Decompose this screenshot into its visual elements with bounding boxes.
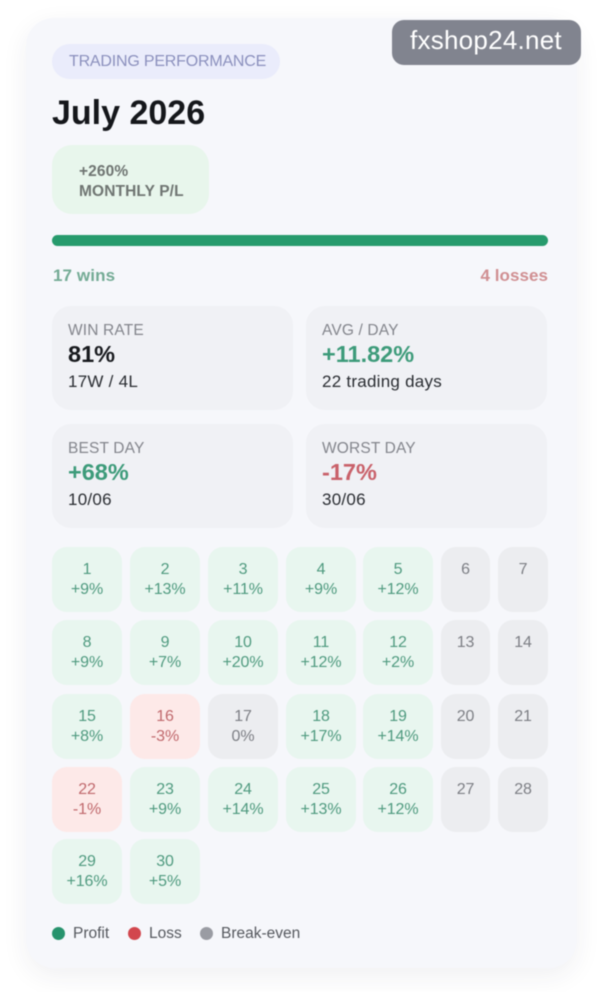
calendar grid: 16 bbox=[156, 708, 174, 725]
calendar grid: 0% bbox=[232, 728, 254, 744]
stat: best day: +68% bbox=[68, 459, 129, 485]
calendar grid: 1 bbox=[83, 561, 91, 578]
losses label: 4 losses bbox=[480, 266, 548, 285]
calendar grid bbox=[52, 547, 548, 904]
calendar grid: 18 bbox=[312, 708, 330, 725]
calendar grid: +9% bbox=[305, 580, 337, 598]
stat: average per day bbox=[306, 306, 547, 410]
calendar grid: 3 bbox=[239, 561, 247, 578]
calendar grid: +14% bbox=[223, 800, 263, 818]
calendar grid: 5 bbox=[394, 561, 402, 578]
stat: win rate: WIN RATE bbox=[68, 322, 144, 339]
stat: average per day: +11.82% bbox=[322, 341, 414, 367]
calendar grid: 28 bbox=[514, 781, 532, 798]
stat: best day: BEST DAY bbox=[68, 440, 144, 457]
calendar grid: +7% bbox=[149, 654, 181, 670]
legend: Break-even bbox=[221, 925, 300, 942]
stat: win rate: 17W / 4L bbox=[68, 372, 138, 391]
calendar grid: +17% bbox=[301, 728, 341, 744]
calendar grid: 25 bbox=[312, 781, 330, 798]
calendar grid: -1% bbox=[73, 800, 101, 818]
calendar grid: 2 bbox=[161, 561, 169, 578]
watermark: fxshop24.net: fxshop24.net bbox=[410, 25, 562, 55]
calendar grid: 7 bbox=[519, 561, 527, 578]
calendar grid: +5% bbox=[149, 872, 181, 890]
calendar grid: +12% bbox=[301, 654, 341, 670]
calendar grid: 17 bbox=[234, 708, 252, 725]
stat: average per day: 22 trading days bbox=[322, 372, 442, 391]
calendar grid: +12% bbox=[378, 800, 418, 818]
calendar grid: +13% bbox=[145, 580, 185, 598]
monthly P/L box: MONTHLY P/L bbox=[79, 182, 184, 200]
title: July 2026 bbox=[52, 94, 205, 132]
stat: worst day: 30/06 bbox=[322, 490, 366, 509]
calendar grid: 14 bbox=[514, 634, 532, 651]
calendar grid: +13% bbox=[301, 800, 341, 818]
calendar grid: 4 bbox=[317, 561, 325, 578]
calendar grid: +11% bbox=[223, 580, 263, 598]
calendar grid: 13 bbox=[457, 634, 474, 651]
monthly P/L box: +260% bbox=[79, 163, 128, 180]
calendar grid: +20% bbox=[223, 654, 263, 670]
calendar grid: 29 bbox=[78, 853, 96, 870]
calendar grid: 20 bbox=[457, 708, 474, 725]
calendar grid: +8% bbox=[71, 728, 103, 744]
progress bar bbox=[52, 235, 548, 246]
legend: Profit bbox=[73, 925, 109, 942]
stat: win rate bbox=[52, 306, 293, 410]
legend: Loss bbox=[149, 925, 182, 942]
calendar grid: 11 bbox=[313, 634, 329, 651]
calendar grid: +14% bbox=[378, 728, 418, 744]
calendar grid: 21 bbox=[514, 708, 532, 725]
stat: worst day: -17% bbox=[322, 459, 377, 485]
stat: worst day bbox=[306, 424, 547, 528]
stat: best day bbox=[52, 424, 293, 528]
calendar grid: +2% bbox=[382, 654, 414, 670]
calendar grid: 23 bbox=[156, 781, 174, 798]
stat: worst day: WORST DAY bbox=[322, 440, 416, 457]
calendar grid: +9% bbox=[149, 800, 181, 818]
stat: best day: 10/06 bbox=[68, 490, 112, 509]
calendar grid: 30 bbox=[156, 853, 174, 870]
badge: trading performance: TRADING PERFORMANCE bbox=[69, 53, 266, 70]
calendar grid: 27 bbox=[457, 781, 474, 798]
calendar grid: 10 bbox=[234, 634, 252, 651]
calendar grid: 22 bbox=[78, 781, 96, 798]
calendar grid: +9% bbox=[71, 580, 103, 598]
calendar grid: 15 bbox=[78, 708, 96, 725]
monthly P/L box bbox=[52, 145, 209, 214]
stat: win rate: 81% bbox=[68, 341, 115, 367]
calendar grid: -3% bbox=[151, 728, 179, 744]
calendar grid: 6 bbox=[461, 561, 470, 578]
watermark: fxshop24.net bbox=[392, 20, 581, 65]
stat: average per day: AVG / DAY bbox=[322, 322, 399, 339]
calendar grid: 9 bbox=[161, 634, 169, 651]
calendar grid: 12 bbox=[389, 634, 407, 651]
calendar grid: 8 bbox=[83, 634, 91, 651]
calendar grid: +12% bbox=[378, 580, 418, 598]
calendar grid: 19 bbox=[389, 708, 407, 725]
wins label: 17 wins bbox=[53, 266, 115, 285]
calendar grid: 26 bbox=[389, 781, 407, 798]
calendar grid: 24 bbox=[234, 781, 252, 798]
badge: trading performance bbox=[52, 44, 280, 79]
calendar grid: +16% bbox=[67, 872, 107, 890]
calendar grid: +9% bbox=[71, 654, 103, 670]
